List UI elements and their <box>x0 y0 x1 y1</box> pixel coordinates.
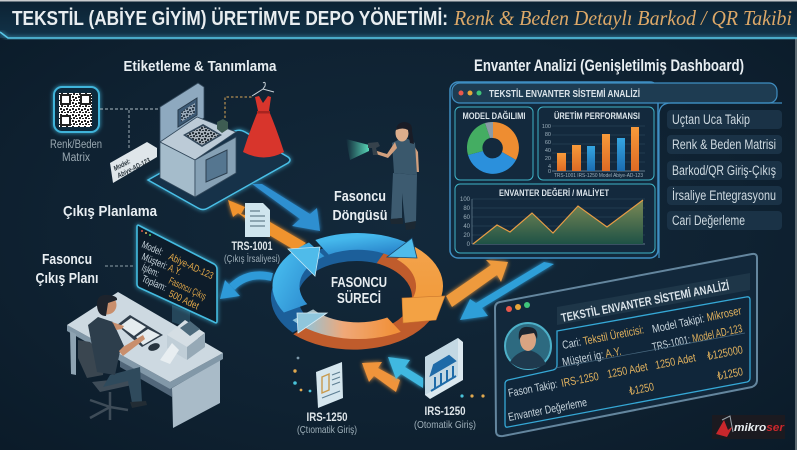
cycle centre label: FASONCU <box>331 274 387 291</box>
arrowhead top left <box>288 247 320 276</box>
label: IRS-1250 left: (Çtıomatik Giriş) <box>297 424 357 436</box>
dashed connector <box>100 109 158 150</box>
feature: barcode <box>667 161 782 180</box>
card customer details: Müşteri ig: A.Y. <box>561 346 622 369</box>
card customer details: Cari: Tekstil Üreticisi: <box>561 324 645 352</box>
bar chart: 60 <box>545 140 551 146</box>
line chart: 100 <box>460 197 471 203</box>
panel: inventory value <box>455 184 655 253</box>
worker <box>88 295 147 408</box>
card tracking row: 1250 Adet <box>654 352 697 372</box>
panel: desk monitor plan <box>137 225 217 328</box>
feature: valuation <box>667 211 782 230</box>
arrow: blue into cycle <box>252 184 320 231</box>
tag label: Model: <box>113 158 132 173</box>
bar chart: 0 <box>548 169 551 175</box>
heading: cycle: Döngüsü <box>332 207 388 224</box>
heading: labeling: Etiketleme & Tanımlama <box>124 58 277 75</box>
panel: production performance <box>538 107 654 180</box>
bar chart: 80 <box>545 132 551 138</box>
card customer details: TRS-1001: Model AD-123 <box>651 323 744 354</box>
card inner frame <box>505 297 750 427</box>
arrow: blue from dashboard <box>460 262 554 320</box>
card tracking row <box>507 344 744 400</box>
cycle ring <box>284 238 445 341</box>
arc right orange <box>406 253 430 308</box>
line chart: 0 <box>467 242 471 248</box>
card tracking row: IRS-1250 <box>560 371 600 390</box>
logo: mikroser: mikroser <box>734 422 785 434</box>
icon: bank building <box>425 338 463 399</box>
line chart <box>460 197 645 248</box>
ring depth blue <box>284 253 382 327</box>
tablet and papers <box>117 315 163 347</box>
header band <box>0 0 797 38</box>
feature: matrix <box>667 135 782 154</box>
operator with scanner <box>346 122 419 230</box>
operator shoes <box>390 218 416 230</box>
dots right <box>460 394 485 398</box>
label: IRS-1250 left <box>297 410 357 436</box>
operator head <box>396 124 408 142</box>
panel: desk monitor plan: Model: <box>140 240 164 258</box>
dashboard title bar: TEKSTİL ENVANTER SİSTEMİ ANALİZİ <box>489 87 640 100</box>
bar chart: 40 <box>545 148 551 154</box>
icon: QR code matrix <box>54 87 99 132</box>
dots left <box>293 357 311 392</box>
cycle centre label: SÜRECİ <box>337 290 381 307</box>
panel: desk monitor plan: Toplam: <box>140 274 168 294</box>
donut chart <box>467 122 519 174</box>
card valuation row: Envanter Değerleme <box>507 397 588 424</box>
panel: desk monitor plan: Abiye-AD-123 <box>167 252 215 282</box>
feature: valuation: Cari Değerleme <box>672 213 745 228</box>
labeling machine <box>160 83 236 197</box>
icon: red dress on hanger <box>243 82 284 158</box>
card tracking row: Fason Takip: <box>507 379 559 400</box>
operator right arm <box>412 144 419 172</box>
label: IRS-1250 right: IRS-1250 <box>424 404 466 418</box>
bar chart: TRS-1001 IRS-1250 Model Abiye-AD-123 <box>554 173 643 179</box>
arc bottom fade <box>303 315 394 331</box>
dashboard title bar <box>452 83 777 103</box>
feature: tracking <box>667 110 782 129</box>
chair <box>78 340 132 420</box>
QR label: Matrix <box>62 152 90 164</box>
card tracking row: ₺125000 <box>706 344 744 363</box>
mouse <box>147 342 161 352</box>
panel: desk monitor plan: 500 Adet <box>167 289 201 312</box>
QR label: Renk/Beden <box>50 139 102 151</box>
panel: dashboard <box>450 82 777 258</box>
panel: tilted inventory card <box>495 254 757 436</box>
heading: planning: Çıkış Planlama <box>63 203 158 220</box>
card tracking row: ₺1250 <box>628 381 655 398</box>
illustration: desk with worker <box>67 292 223 428</box>
line chart: 60 <box>463 215 471 221</box>
ring depth orange <box>303 256 425 341</box>
logo: mikroser <box>712 415 785 439</box>
dashed connector to dress <box>225 97 252 118</box>
panel: model distribution: MODEL DAĞILIMI <box>462 110 526 121</box>
label: IRS-1250 right: (Otomatik Giriş) <box>414 419 476 431</box>
panel: desk monitor plan: İşlem: <box>140 261 161 280</box>
scanner <box>368 142 380 155</box>
label: IRS-1250 left: IRS-1250 <box>306 410 348 424</box>
label: TRS-1001 <box>224 239 280 265</box>
card tracking row: 1250 Adet <box>606 361 649 381</box>
dashed connector to monitor <box>105 265 134 267</box>
cycle centre label <box>331 274 387 307</box>
panel: desk monitor plan: Müşteri: A.Y. <box>140 252 183 278</box>
bar chart: 4 <box>548 164 551 170</box>
card customer details: Model Takipi: Mikroser <box>651 305 743 336</box>
arrowhead bottom left <box>297 313 327 333</box>
operator torso <box>392 139 417 175</box>
bar chart: 20 <box>545 156 551 162</box>
arrowhead orange <box>402 296 445 323</box>
icon: TRS-1001 document <box>245 203 270 237</box>
icon: IRS-1250 document <box>316 362 343 408</box>
label: TRS-1001: TRS-1001 <box>232 239 273 253</box>
heading: cycle: Fasoncu <box>334 188 386 205</box>
title: TEKSTİL (ABİYE GİYİM) ÜRETİMVE DEPO YÖNETİMİ: <box>12 7 448 30</box>
arrow: cycle to monitor <box>220 275 272 299</box>
bar chart <box>542 124 645 179</box>
heading: subcontractor plan <box>36 251 98 287</box>
operator trousers <box>391 173 417 223</box>
panel: production performance: ÜRETİM PERFORMANSI <box>554 111 640 121</box>
heading: subcontractor plan: Fasoncu <box>42 251 92 268</box>
QR label <box>50 139 102 164</box>
card tracking row: ₺1250 <box>716 366 744 383</box>
bar chart: 100 <box>542 124 551 130</box>
line chart: 20 <box>463 233 471 239</box>
arrowhead top right <box>387 238 417 258</box>
platform <box>148 130 290 210</box>
panel: inventory value: ENVANTER DEĞERİ / MALİYET <box>499 187 609 199</box>
panel: desk monitor plan: Fasoncu Çıkış <box>167 276 208 303</box>
heading: cycle <box>332 188 388 224</box>
printer <box>160 320 205 364</box>
arc left blue <box>286 249 317 308</box>
card customer details <box>561 305 744 369</box>
panel: model distribution <box>455 107 533 180</box>
avatar <box>505 323 551 369</box>
operator left arm <box>376 142 397 158</box>
arrow: orange to doc <box>228 200 306 251</box>
feature: tracking: Uçtan Uca Takip <box>672 112 750 127</box>
tag label <box>110 142 157 183</box>
label: TRS-1001: (Çıkış İrsaliyesi) <box>224 252 280 265</box>
feature: waybill <box>667 186 782 205</box>
line chart: 40 <box>463 224 471 230</box>
panel: feature list <box>659 103 782 258</box>
heading: subcontractor plan: Çıkış Planı <box>36 270 98 287</box>
label: IRS-1250 right <box>414 404 476 431</box>
tag label: Abiye-AD-123 <box>116 157 152 180</box>
card title bar: TEKSTİL ENVANTER SİSTEMİ ANALİZİ <box>560 278 730 325</box>
line chart: 80 <box>463 206 471 212</box>
card divider <box>555 333 745 368</box>
arrow: orange to dashboard <box>446 260 508 307</box>
arc top blue <box>322 241 403 251</box>
arrow: orange up to cycle <box>362 362 400 392</box>
arrow: blue up to cycle <box>388 357 423 388</box>
